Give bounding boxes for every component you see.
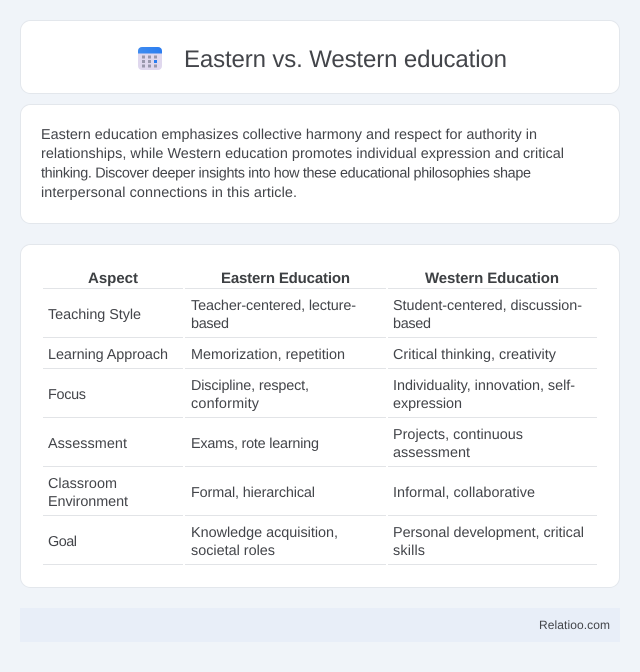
row: learning approach: Critical thinking, creativity bbox=[393, 347, 557, 363]
row: goal: societal roles bbox=[191, 543, 275, 559]
text block: introduction: thinking. Discover deeper insights into how these educational philosophies shape bbox=[41, 166, 531, 182]
row: classroom environment bbox=[48, 476, 535, 510]
table header: Western Education bbox=[425, 270, 559, 287]
text block: introduction: relationships, while Western education promotes individual expression and critical bbox=[41, 146, 564, 162]
row: learning approach: Learning Approach bbox=[48, 347, 168, 363]
row: learning approach bbox=[48, 347, 557, 363]
row: teaching style: Student-centered, discussion- bbox=[393, 298, 582, 314]
row: teaching style: Teaching Style bbox=[48, 307, 141, 323]
row: classroom environment: Informal, collaborative bbox=[393, 485, 535, 501]
row: assessment: Projects, continuous bbox=[393, 427, 523, 443]
row: goal: Goal bbox=[48, 534, 77, 550]
row: teaching style: based bbox=[191, 316, 229, 332]
title: Eastern vs. Western education bbox=[184, 46, 507, 73]
row: assessment: Assessment bbox=[48, 436, 127, 452]
row: classroom environment: Formal, hierarchical bbox=[191, 485, 315, 501]
footer bbox=[20, 608, 620, 642]
row: goal: Knowledge acquisition, bbox=[191, 525, 338, 541]
table header: Aspect bbox=[88, 270, 138, 287]
text block: introduction bbox=[41, 127, 564, 201]
row: focus: Discipline, respect, bbox=[191, 378, 309, 394]
row: focus: conformity bbox=[191, 396, 260, 412]
row: focus: expression bbox=[393, 396, 462, 412]
row: classroom environment: Environment bbox=[48, 494, 128, 510]
row: assessment: Exams, rote learning bbox=[191, 436, 319, 452]
panel: title card bbox=[20, 20, 620, 94]
table header: Eastern Education bbox=[221, 270, 350, 287]
row: focus: Individuality, innovation, self- bbox=[393, 378, 575, 394]
table header bbox=[88, 270, 559, 287]
text block: introduction: Eastern education emphasizes collective harmony and respect for authority in bbox=[41, 127, 537, 143]
row: focus bbox=[48, 378, 575, 412]
icon: calendar bbox=[138, 47, 162, 70]
row: assessment: assessment bbox=[393, 445, 470, 461]
row: teaching style: based bbox=[393, 316, 431, 332]
row: teaching style: Teacher-centered, lecture- bbox=[191, 298, 356, 314]
row: learning approach: Memorization, repetition bbox=[191, 347, 345, 363]
row: classroom environment: Classroom bbox=[48, 476, 117, 492]
panel: introduction bbox=[20, 104, 620, 224]
panel: comparison table bbox=[20, 244, 620, 588]
footer credit: Relatioo.com bbox=[539, 618, 610, 632]
row: focus: Focus bbox=[48, 387, 86, 403]
row: goal: skills bbox=[393, 543, 425, 559]
row: teaching style bbox=[48, 298, 582, 332]
text block: introduction: interpersonal connections in this article. bbox=[41, 185, 297, 201]
row: goal: Personal development, critical bbox=[393, 525, 584, 541]
row: assessment bbox=[48, 427, 523, 461]
row: goal bbox=[48, 525, 584, 559]
